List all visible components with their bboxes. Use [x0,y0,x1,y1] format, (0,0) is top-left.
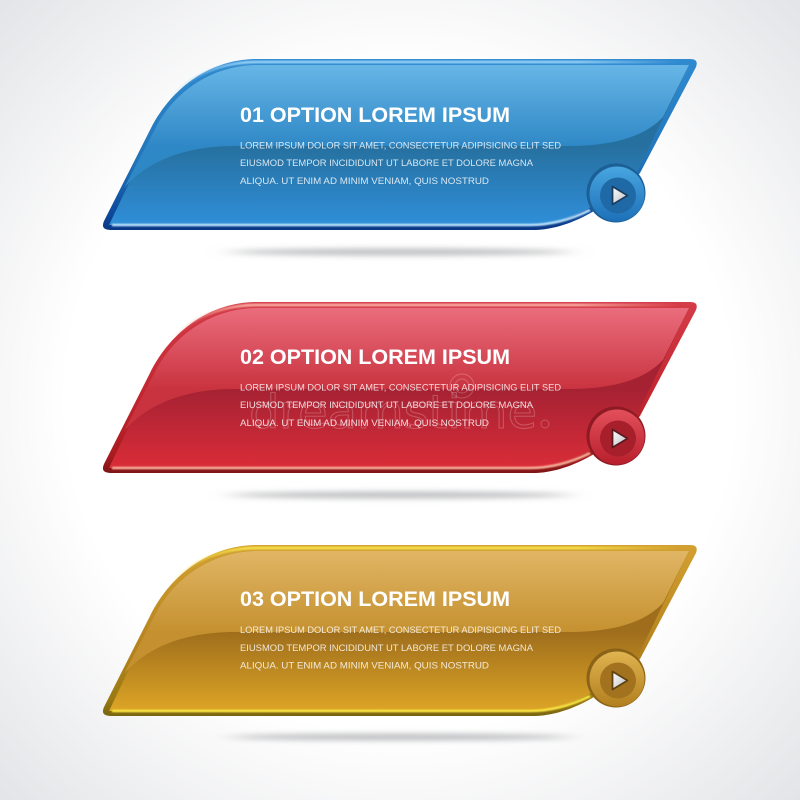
body text: EIUSMOD TEMPOR INCIDIDUNT UT LABORE ET DOLORE MAGNA [240,158,534,169]
body text: EIUSMOD TEMPOR INCIDIDUNT UT LABORE ET DOLORE MAGNA [240,643,534,654]
body text: ALIQUA. UT ENIM AD MINIM VENIAM, QUIS NOSTRUD [240,660,489,672]
banner body [103,59,697,230]
body text: ALIQUA. UT ENIM AD MINIM VENIAM, QUIS NOSTRUD [240,176,489,187]
body text: LOREM IPSUM DOLOR SIT AMET, CONSECTETUR ADIPISICING ELIT SED [240,625,561,636]
banner body [103,302,697,473]
icon: play button [586,164,646,222]
panel: option 01 (blue) [103,59,697,255]
body text [240,140,561,187]
watermark: dreamstime [249,385,537,439]
panel: option 03 (gold) [103,545,697,740]
floor shadow [228,249,572,255]
body text [240,625,561,672]
heading: 01 OPTION LOREM IPSUM [240,104,510,127]
floor shadow [228,734,572,740]
floor shadow [228,492,572,498]
body text: ALIQUA. UT ENIM AD MINIM VENIAM, QUIS NOSTRUD [240,418,489,429]
icon: play button [586,648,646,708]
heading: 03 OPTION LOREM IPSUM [240,588,510,611]
banner body [103,545,697,716]
heading: 02 OPTION LOREM IPSUM [240,346,510,369]
icon: play button [586,406,646,466]
body text: EIUSMOD TEMPOR INCIDIDUNT UT LABORE ET DOLORE MAGNA [240,400,534,411]
panel: option 02 (red) [103,302,697,498]
body text: LOREM IPSUM DOLOR SIT AMET, CONSECTETUR ADIPISICING ELIT SED [240,140,561,152]
body text [240,382,561,429]
body text: LOREM IPSUM DOLOR SIT AMET, CONSECTETUR ADIPISICING ELIT SED [240,382,561,394]
